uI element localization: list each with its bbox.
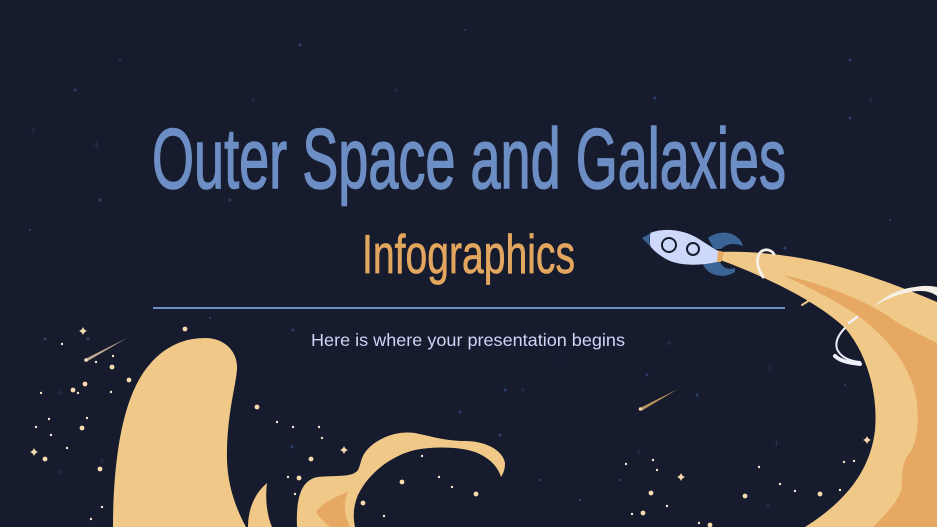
tagline: Here is where your presentation begins [311, 330, 625, 350]
rocket fins [708, 233, 743, 249]
porthole large [662, 238, 676, 252]
white ring around trail [757, 250, 774, 277]
planet blob left [113, 338, 246, 527]
rocket body [650, 230, 718, 265]
subtitle heading: Infographics [362, 223, 575, 285]
white ring upper right [873, 286, 937, 307]
small streak near trail [802, 300, 810, 305]
shooting star right [639, 389, 678, 411]
nebula wave [297, 432, 505, 527]
rocket flame trail [720, 252, 937, 527]
porthole small [687, 243, 699, 255]
white ring lower left [835, 317, 860, 364]
star field [30, 327, 871, 527]
divider line [153, 307, 785, 309]
rocket nozzle [715, 250, 724, 262]
rocket nose [642, 233, 651, 247]
rocket [642, 230, 743, 276]
shooting star left [84, 338, 127, 362]
small crescent [248, 483, 272, 527]
